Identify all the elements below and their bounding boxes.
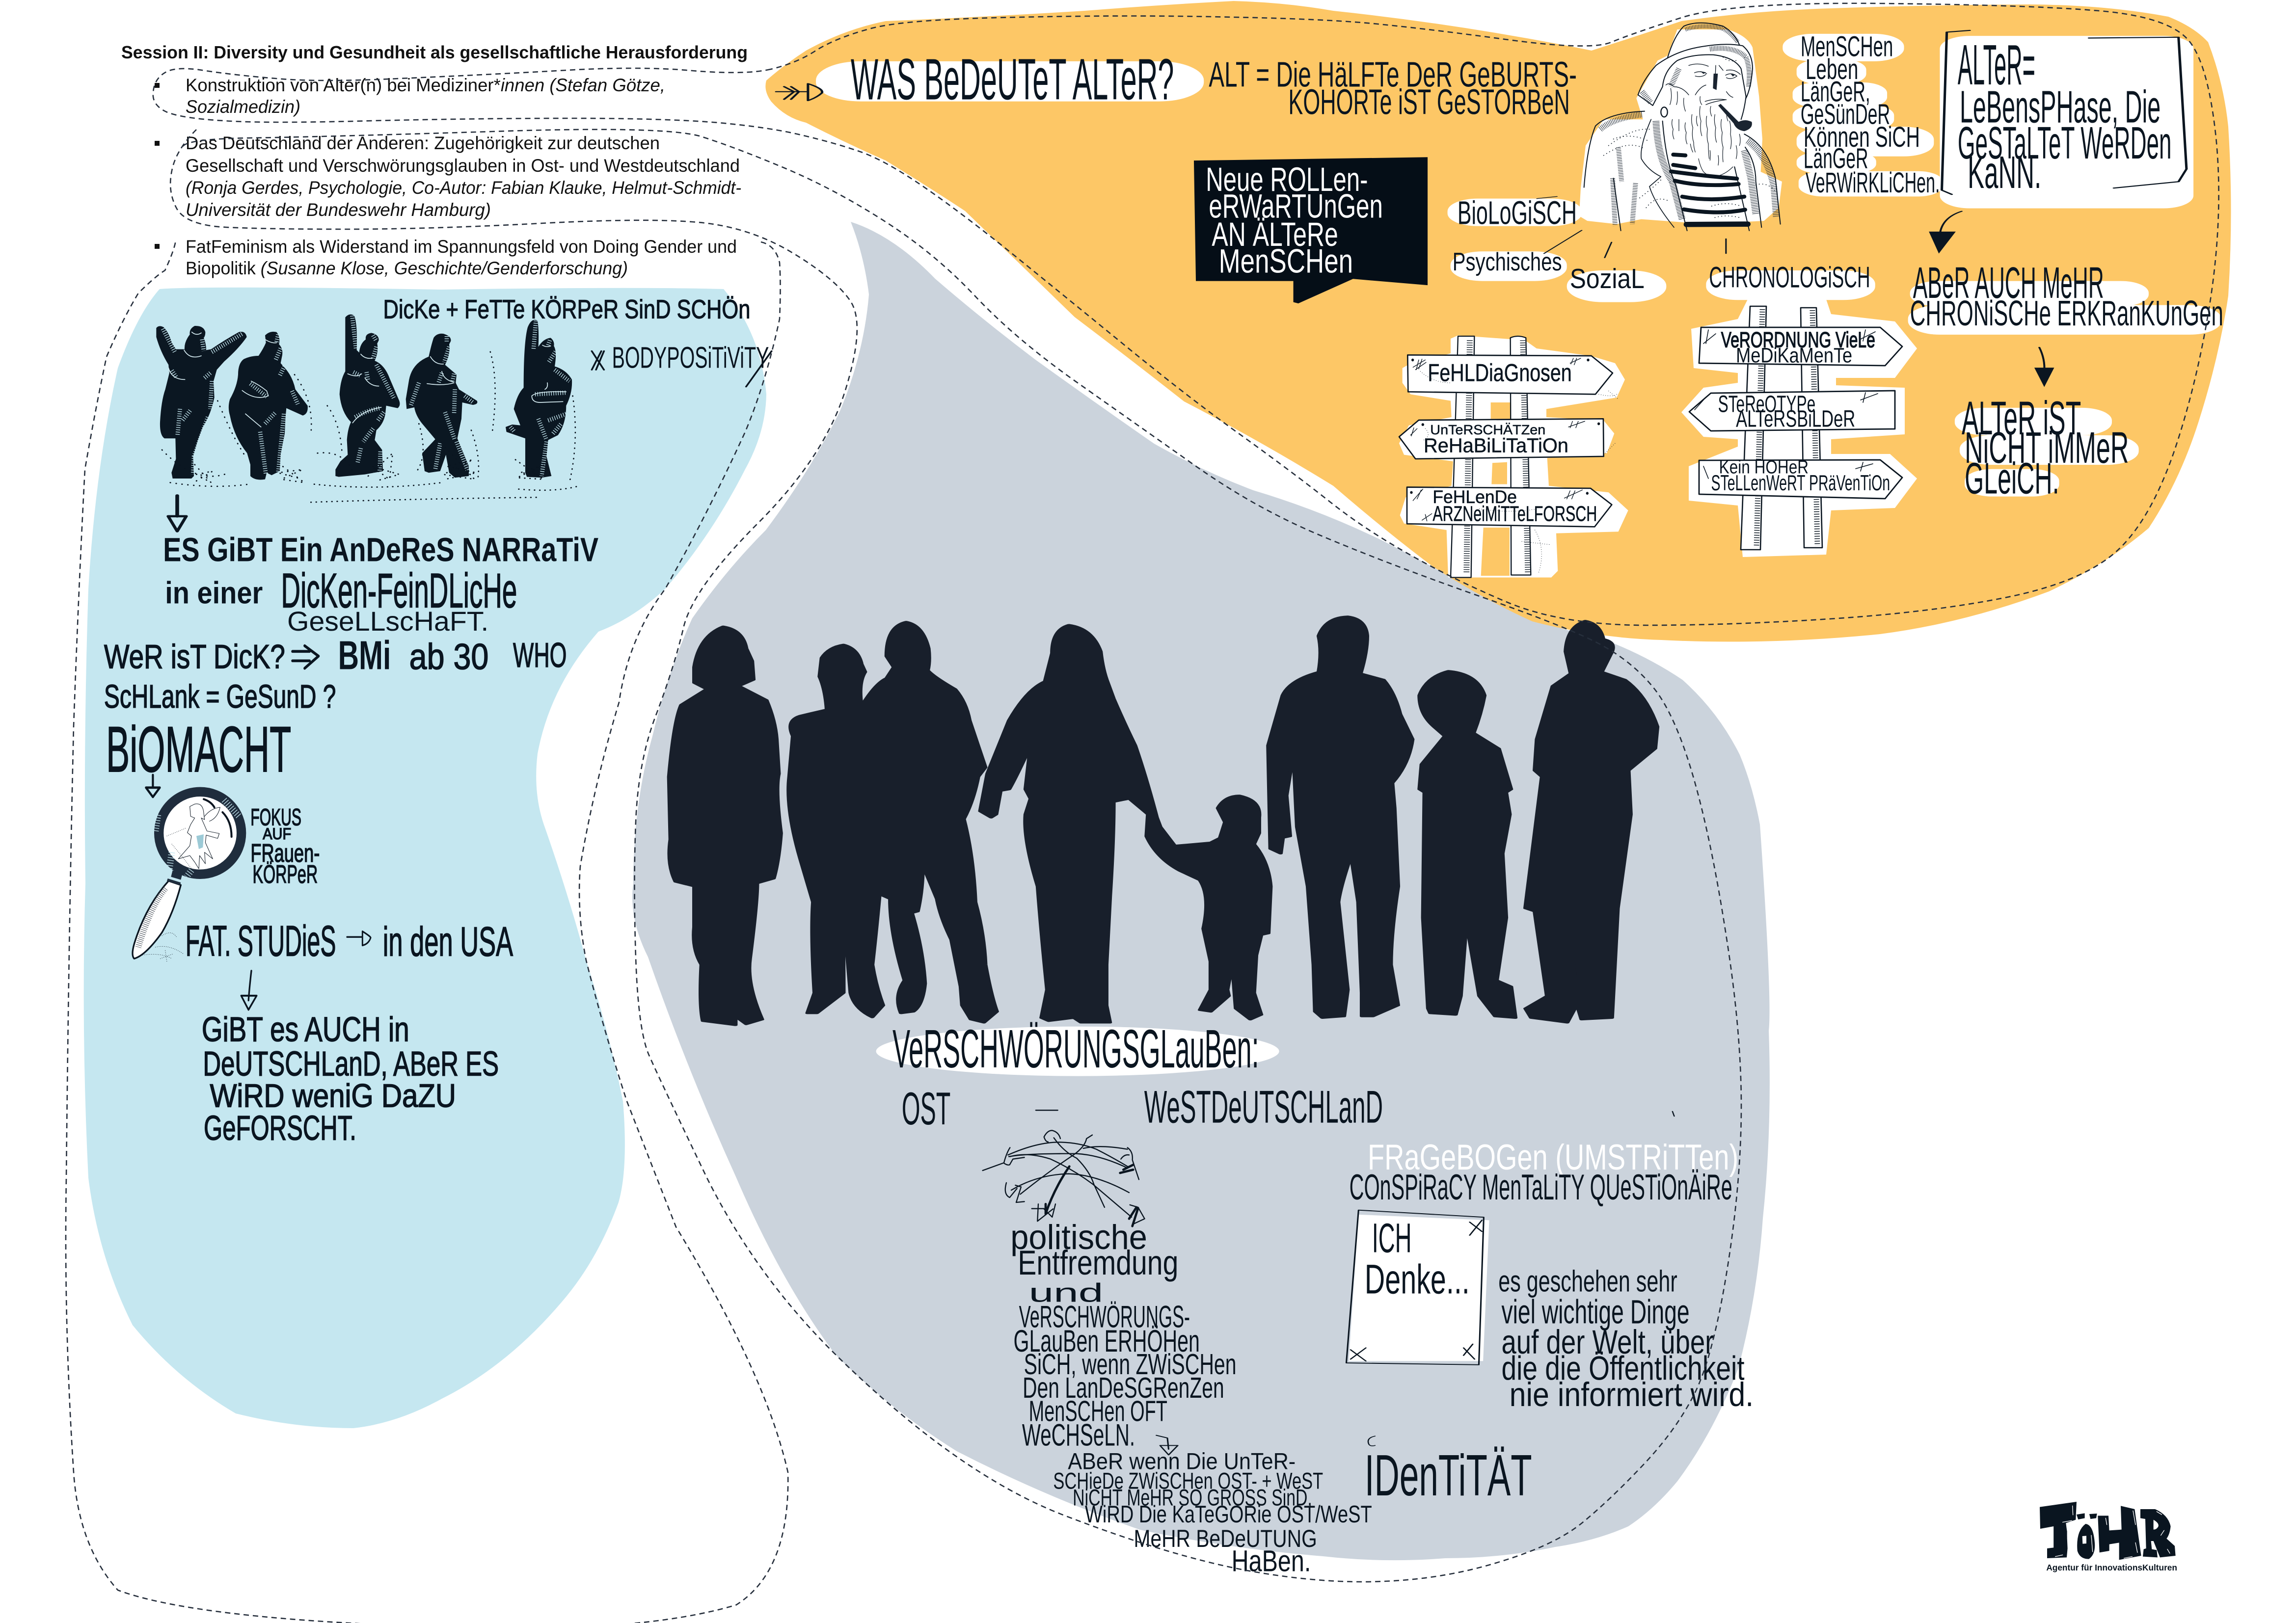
panel: conspiracy beliefs contents: WiRD Die KaTeGORie OST/WeST xyxy=(1085,1501,1372,1528)
dimension labels xyxy=(1453,194,1870,294)
earring xyxy=(1661,107,1668,117)
signpost left lettering: FeHLenDe xyxy=(1432,487,1517,507)
panel: people silhouettes xyxy=(669,616,1657,1025)
questionnaire statement: es geschehen sehr xyxy=(1498,1264,1677,1298)
questionnaire heading xyxy=(1350,1137,1738,1208)
text: also in Germany: WiRD weniG DaZU xyxy=(210,1078,456,1115)
text: focus on female bodies: KÖRPeR xyxy=(252,860,318,889)
question: who is fat: ScHLank = GeSunD ? xyxy=(104,678,336,715)
illustration: dancing figures right trio xyxy=(335,315,572,478)
text: more chronic diseases xyxy=(1910,258,2223,333)
signpost right xyxy=(1681,299,1917,557)
signpost left lettering xyxy=(1424,359,1597,526)
card: Ich denke: ICH xyxy=(1372,1215,1412,1261)
speech bubble: new role expectations xyxy=(1194,157,1428,303)
questionnaire statement: auf der Welt, über xyxy=(1501,1323,1714,1361)
panel: conspiracy beliefs contents xyxy=(876,1018,1754,1578)
face details xyxy=(1666,64,1740,105)
list item 1: Konstruktion von Alter(n) bei Mediziner*innen (Stefan Götze, xyxy=(186,75,665,95)
word: Identität xyxy=(1365,1111,1674,1508)
list item 3 xyxy=(155,237,737,278)
list item 2 xyxy=(155,133,741,220)
infographic canvas: FRaGeBOGen (UMSTRiTTen) xyxy=(1368,1137,1738,1177)
text: focus on female bodies: AUF xyxy=(263,825,291,843)
text: people live longer: Leben xyxy=(1806,53,1858,85)
question: who is fat: WHO xyxy=(513,636,567,675)
panel: what does age mean (orange) xyxy=(765,1,2231,642)
list item 2: Das Deutschland der Anderen: Zugehörigkeit zur deutschen xyxy=(186,133,660,153)
East - West Germany: OST xyxy=(902,1083,950,1134)
panel: conspiracy beliefs contents: SiCH, wenn ZWiSCHen xyxy=(1024,1348,1237,1381)
question: who is fat xyxy=(104,633,567,715)
signpost right lettering xyxy=(1711,328,1890,495)
speech bubble: new role expectations: AN ÄLTeRe xyxy=(1212,215,1338,253)
magnifier handle xyxy=(133,881,181,958)
statement: another narrative: ES GiBT Ein AnDeReS NARRaTiV xyxy=(163,531,598,569)
list item 2: Universität der Bundeswehr Hamburg) xyxy=(186,200,491,220)
signpost right lettering: Kein HOHeR xyxy=(1719,456,1809,478)
silhouette: woman with bun xyxy=(1525,621,1657,1023)
white highlight shapes behind lettering xyxy=(816,34,2221,497)
shirt stripes xyxy=(1671,155,1745,213)
text: but when differences: SCHieDe ZWiSCHen OST- + WeST xyxy=(1053,1467,1323,1494)
list item 2: (Ronja Gerdes, Psychologie, Co-Autor: Fabian Klauke, Helmut-Schmidt- xyxy=(186,178,741,198)
text: also in Germany xyxy=(202,1011,499,1148)
silhouette: woman holding child's hand xyxy=(980,625,1270,1023)
beard strokes xyxy=(1670,88,1740,177)
text: political alienation xyxy=(1010,1218,1237,1452)
dimension labels: SoziaL xyxy=(1570,263,1645,294)
text: but when differences: NiCHT MeHR SO GROSS SinD, xyxy=(1073,1485,1312,1511)
lens highlights xyxy=(204,799,232,837)
panel: intro session text xyxy=(121,42,748,278)
list item 1 xyxy=(155,75,665,117)
text: people live longer: LänGeR xyxy=(1804,142,1868,174)
illustration: dancing figures left pair xyxy=(156,326,308,479)
figure inside lens xyxy=(178,804,220,869)
text group in zoom coordinates: Können SiCH xyxy=(1804,121,1920,153)
silhouette: woman left xyxy=(669,627,781,1025)
arrow down to Germany xyxy=(241,971,257,1010)
fat studies line: in den USA xyxy=(383,919,513,965)
text group in zoom coordinates: Neue ROLLen- xyxy=(1206,160,1368,198)
dimension labels: Psychisches xyxy=(1453,247,1562,276)
session heading: Session II: Diversity und Gesundheit als gesellschaftliche Herausforderung xyxy=(121,42,748,62)
icon: crossed network lines xyxy=(983,1130,1145,1226)
icon: magnifying glass with figure xyxy=(133,792,242,962)
panel: conspiracy beliefs contents: GLauBen ERHÖHen xyxy=(1013,1324,1200,1358)
arrow down to age is not always the same xyxy=(2034,347,2054,387)
panel background: grey conspiracy blob xyxy=(632,222,1770,1560)
list item 1: Sozialmedizin) xyxy=(186,97,300,117)
text: but when differences: HaBen. xyxy=(1232,1544,1311,1578)
text: but when differences: MeHR BeDeUTUNG xyxy=(1134,1525,1317,1552)
text: political alienation: politische xyxy=(1010,1218,1147,1257)
panel: conspiracy beliefs contents: VeRSCHWÖRUNGS- xyxy=(1019,1299,1190,1334)
text group in zoom coordinates: MenSCHen xyxy=(1801,30,1893,62)
text: political alienation: und xyxy=(1029,1278,1103,1307)
small arrow to magnifier xyxy=(146,775,160,797)
pipe xyxy=(1718,104,1752,131)
heading: thick bodies are beautiful: DicKe + FeTTe KÖRPeR SinD SCHÖn xyxy=(383,295,750,324)
text group in zoom coordinates xyxy=(776,30,2223,503)
box: Alter = Lebensphase xyxy=(1942,30,2187,198)
panel: conspiracy beliefs contents: Denke... xyxy=(1365,1256,1470,1303)
text: also in Germany: DeUTSCHLanD, ABeR ES xyxy=(203,1044,499,1083)
East - West Germany xyxy=(902,1081,1383,1134)
statement: fat hostile society: DicKen-FeinDLicHe xyxy=(281,563,517,618)
text: political alienation: MenSCHen OFT xyxy=(1029,1395,1167,1428)
orange blob xyxy=(765,1,2231,642)
text: but when differences: ABeR wenn Die UnTeR- xyxy=(1068,1448,1296,1474)
questionnaire statement: die die Öffentlichkeit xyxy=(1501,1349,1745,1387)
text: political alienation: Entfremdung xyxy=(1018,1244,1178,1282)
question: who is fat: WeR isT DicK? xyxy=(104,638,285,676)
arrow down xyxy=(168,496,186,531)
signpost left lettering: FeHLDiaGnosen xyxy=(1428,359,1572,387)
question: who is fat: BMi xyxy=(338,633,391,678)
text: focus on female bodies xyxy=(250,804,320,889)
arrow into title xyxy=(776,83,822,101)
text: people live longer: LänGeR, xyxy=(1801,76,1870,107)
signpost right: MeDiKaMenTe xyxy=(1736,344,1852,367)
panel: fat feminism contents lower xyxy=(104,531,598,1148)
statement: fat hostile society: in einer xyxy=(165,576,263,611)
list item 3: Biopolitik (Susanne Klose, Geschichte/Genderforschung) xyxy=(186,258,628,278)
text: age is not always the same xyxy=(1962,392,2129,503)
text: but when differences xyxy=(1053,1448,1372,1578)
signpost left lettering: ReHaBiLiTaTiOn xyxy=(1424,434,1568,457)
small arrow xyxy=(1157,1436,1178,1455)
statement: fat hostile society: GeseLLscHaFT. xyxy=(287,607,488,637)
text: focus on female bodies: FOKUS xyxy=(250,804,301,830)
text group in zoom coordinates: eRWaRTUnGen xyxy=(1209,187,1383,225)
word: Identität: IDenTiTÄT xyxy=(1365,1443,1532,1508)
panel: what does age mean (orange): ALTeRSBiLDeR xyxy=(1736,405,1855,432)
questionnaire statement: viel wichtige Dinge xyxy=(1501,1293,1690,1331)
panel: conspiracy beliefs contents: VeRSCHWÖRUNGSGLauBen: xyxy=(892,1018,1259,1079)
text: also in Germany: GeFORSCHT. xyxy=(204,1109,356,1148)
speech bubble: new role expectations: MenSCHen xyxy=(1219,242,1353,280)
dimension labels: BioLoGiSCH xyxy=(1458,194,1577,231)
text group in zoom coordinates: GeSünDeR xyxy=(1801,98,1890,130)
card: Ich denke xyxy=(1346,1210,1489,1365)
arrow down to chronic diseases xyxy=(1929,211,1962,254)
illustration: old sailor with pipe xyxy=(1579,23,1782,231)
list item 2: Gesellschaft und Verschwörungsglauben in Ost- und Westdeutschland xyxy=(186,156,740,176)
questionnaire statement: nie informiert wird. xyxy=(1510,1376,1754,1413)
signpost left lettering: ARZNeiMiTTeLFORSCH xyxy=(1432,503,1597,526)
logo: FöHR xyxy=(2040,1502,2177,1572)
text: focus on female bodies: FRauen- xyxy=(250,839,320,868)
panel: conspiracy beliefs contents: WeSTDeUTSCHLanD xyxy=(1144,1081,1383,1132)
heading: Biomacht: BiOMACHT xyxy=(106,714,291,786)
signpost left xyxy=(1399,335,1628,578)
silhouette: boy xyxy=(1420,671,1515,1018)
panel: what does age mean (orange): VeRORDNUNG VieLe xyxy=(1721,328,1875,352)
logo tagline: Agentur für InnovationsKulturen xyxy=(2046,1563,2177,1572)
heading highlight xyxy=(876,1027,1279,1076)
questionnaire statement xyxy=(1498,1264,1754,1413)
infographic canvas: BODYPOSiTiViTY xyxy=(612,341,769,374)
question: who is fat: ab 30 xyxy=(409,636,488,677)
text: political alienation: WeCHSeLN. xyxy=(1022,1417,1135,1452)
silhouette: couple xyxy=(789,622,997,1023)
stipple ground around figures xyxy=(162,348,579,502)
text: people live longer xyxy=(1801,30,1940,198)
panel: fat feminism contents upper xyxy=(168,295,772,531)
panel background: blue fat feminism blob xyxy=(84,288,766,1428)
hashtag bodypositivity xyxy=(592,341,772,387)
signpost right: STeReOTYPe xyxy=(1718,391,1815,417)
definition: Alt xyxy=(1209,54,1577,122)
signpost left lettering: UnTeRSCHÄTZen xyxy=(1430,422,1545,437)
box: Alter = Lebensphase: KaNN. xyxy=(1968,147,2041,198)
list item 3: FatFeminism als Widerstand im Spannungsfeld von Doing Gender und xyxy=(186,237,737,257)
silhouette: man xyxy=(1269,616,1412,1018)
text: also in Germany: GiBT es AUCH in xyxy=(202,1011,409,1049)
statement: fat hostile society xyxy=(165,563,517,637)
panel: conspiracy beliefs contents: Den LanDeSGRenZen xyxy=(1023,1372,1224,1405)
fat studies line: FAT. STUDieS xyxy=(186,917,336,965)
